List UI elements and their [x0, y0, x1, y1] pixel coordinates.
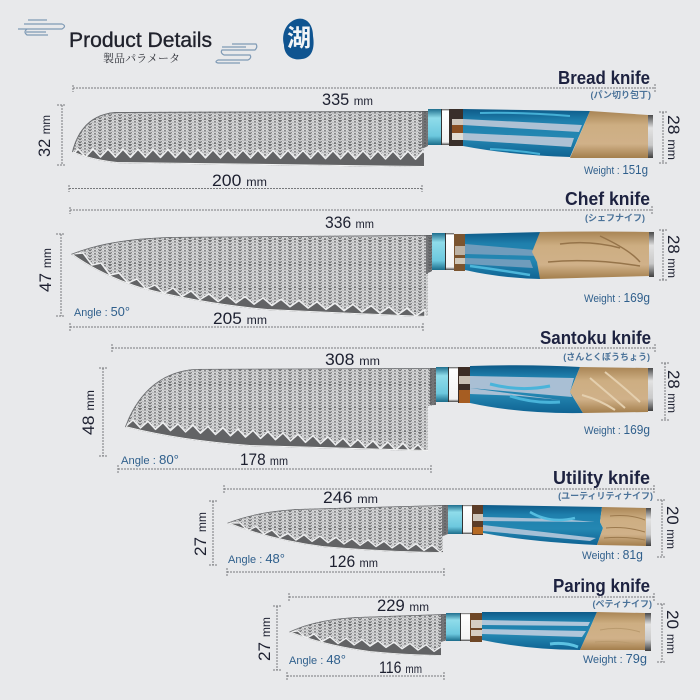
panel: santoku knife [79, 328, 683, 473]
dimension: handle height [657, 604, 682, 662]
heading: bread knife: Bread knife [558, 68, 650, 88]
icon: left cloud [18, 20, 64, 35]
dimension: blade height [255, 606, 281, 670]
handle: bread knife [428, 109, 653, 158]
handle: paring knife [446, 612, 651, 651]
dimension line: total length [70, 206, 652, 214]
subtitle: 製品パラメータ [103, 51, 180, 65]
blade: chef knife [71, 235, 432, 317]
handle: utility knife [448, 505, 651, 546]
dimension: handle height [659, 112, 683, 163]
weight: Weight : 81g [582, 547, 643, 562]
dimension: handle height [659, 230, 683, 280]
header [18, 18, 314, 65]
angle: Angle : 80° [121, 452, 179, 467]
panel: utility knife [191, 468, 682, 576]
dimension: blade height: 47 mm [36, 248, 55, 292]
dimension: handle height: 28 mm [664, 235, 683, 278]
dimension line: total length [112, 344, 655, 352]
dimension: blade length [69, 171, 422, 192]
dimension: blade height [35, 105, 66, 165]
dimension: blade height [191, 501, 217, 565]
dimension: handle height: 20 mm [663, 610, 682, 654]
japanese name: (ペティナイフ) [593, 599, 652, 609]
weight: Weight : 79g [583, 651, 647, 666]
dimension: blade length: 200 mm [212, 171, 267, 190]
heading: chef knife: Chef knife [565, 189, 650, 209]
panel: paring knife [255, 576, 682, 680]
handle: chef knife [432, 232, 654, 279]
blade: paring knife [289, 614, 446, 656]
angle: Angle : 48° [289, 652, 346, 667]
japanese name: (ユーティリティナイフ) [558, 491, 653, 501]
dimension: blade height [79, 368, 107, 456]
weight: Weight : 169g [584, 422, 650, 437]
dimension: blade length: 116 mm [379, 658, 422, 677]
japanese name: (シェフナイフ) [585, 213, 645, 223]
japanese name: (さんとくぼうちょう) [563, 351, 650, 362]
dimension: handle height [661, 363, 683, 420]
blade: santoku knife [125, 368, 436, 451]
label: 229 mm: 229 mm [377, 596, 429, 615]
heading: santoku knife: Santoku knife [540, 328, 651, 348]
dimension: handle height [657, 500, 682, 557]
dimension: blade length [227, 552, 444, 576]
dimension: blade length: 126 mm [329, 552, 378, 571]
dimension: blade length [287, 658, 444, 680]
dimension: blade height [36, 234, 64, 316]
dimension: blade height: 27 mm [191, 512, 210, 556]
dimension line: total length [289, 593, 654, 601]
dimension line: total length [73, 84, 655, 92]
blade: utility knife [227, 505, 448, 553]
label: 246 mm: 246 mm [323, 488, 378, 507]
dimension: handle height: 28 mm [664, 370, 683, 413]
dimension: blade height: 48 mm [79, 390, 98, 435]
dimension: blade length [70, 309, 423, 331]
weight: Weight : 151g [584, 162, 648, 177]
dimension: blade height: 27 mm [255, 617, 274, 661]
label: 336 mm: 336 mm [325, 213, 374, 232]
heading: utility knife: Utility knife [553, 468, 650, 488]
title: Product Details [69, 29, 212, 52]
dimension: handle height: 28 mm [664, 115, 683, 160]
dimension: blade length [118, 450, 431, 473]
weight: Weight : 169g [584, 290, 650, 305]
label: 335 mm: 335 mm [322, 90, 373, 109]
icon: right cloud [216, 44, 257, 63]
label: 308 mm: 308 mm [325, 350, 380, 369]
logo: lake seal: 湖 [287, 18, 311, 53]
panel: bread knife [35, 68, 683, 192]
dimension: blade length: 178 mm [240, 450, 288, 469]
heading: paring knife: Paring knife [553, 576, 650, 596]
dimension line: total length [224, 485, 654, 493]
angle: Angle : 48° [228, 551, 285, 566]
handle: santoku knife [436, 365, 653, 413]
logo: lake seal [283, 18, 314, 59]
dimension: blade length: 205 mm [213, 309, 267, 328]
dimension: handle height: 20 mm [663, 506, 682, 549]
japanese name: (パン切り包丁) [591, 89, 651, 100]
blade: bread knife [72, 111, 428, 167]
dimension: blade height: 32 mm [35, 115, 54, 157]
angle: Angle : 50° [74, 304, 130, 319]
panel: chef knife [36, 189, 683, 331]
